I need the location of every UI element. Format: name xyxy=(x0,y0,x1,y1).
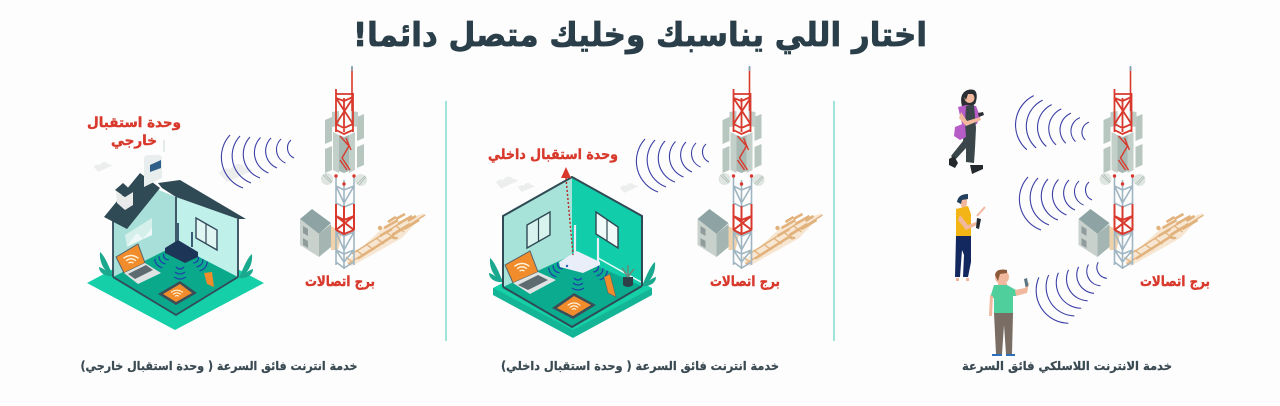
router xyxy=(165,223,198,263)
tablet xyxy=(552,293,596,319)
outdoor antenna xyxy=(144,140,164,187)
divider: right xyxy=(833,101,835,341)
tablet xyxy=(158,281,197,305)
arrow: to indoor unit xyxy=(561,167,573,255)
panel: indoor receiver xyxy=(488,66,822,374)
laptop xyxy=(505,251,556,294)
caption: خدمة انترنت فائق السرعة ( وحدة استقبال داخلي) xyxy=(501,359,779,374)
room illustration xyxy=(489,177,656,338)
cell tower xyxy=(1078,66,1204,269)
cell tower xyxy=(300,66,425,269)
signal waves: bottom xyxy=(1031,257,1117,330)
label: tower: برج اتصالات xyxy=(305,274,375,290)
label: outdoor unit xyxy=(87,115,181,149)
person: man in yellow xyxy=(955,194,985,281)
panel: wireless xyxy=(949,66,1210,373)
roof xyxy=(104,173,246,229)
divider: left xyxy=(445,101,447,341)
label: outdoor unit: خارجي xyxy=(111,133,157,149)
panel: outdoor receiver xyxy=(80,66,425,374)
pot xyxy=(623,277,633,287)
label: outdoor unit: وحدة استقبال xyxy=(87,115,181,131)
title: اختار اللي يناسبك وخليك متصل دائما! xyxy=(353,15,927,55)
phone xyxy=(604,274,616,297)
signal waves xyxy=(636,139,709,192)
caption: خدمة انترنت فائق السرعة ( وحدة استقبال خارجي) xyxy=(80,359,358,374)
cell tower xyxy=(698,66,822,269)
label: indoor unit: وحدة استقبال داخلي xyxy=(488,147,618,163)
caption: خدمة الانترنت اللاسلكي فائق السرعة xyxy=(962,359,1172,373)
signal waves: top xyxy=(1007,92,1093,168)
chimney xyxy=(115,183,133,210)
label: tower: برج اتصالات xyxy=(710,274,780,290)
signal waves: middle xyxy=(1019,177,1092,230)
clouds xyxy=(94,162,253,182)
person: man in green xyxy=(989,270,1029,356)
signal waves xyxy=(221,135,294,188)
house illustration xyxy=(87,140,264,330)
clouds xyxy=(496,177,638,193)
person: woman walking xyxy=(949,90,984,174)
router xyxy=(559,225,600,273)
laptop xyxy=(116,244,161,284)
label: tower: برج اتصالات xyxy=(1140,274,1210,290)
phone xyxy=(204,272,214,287)
